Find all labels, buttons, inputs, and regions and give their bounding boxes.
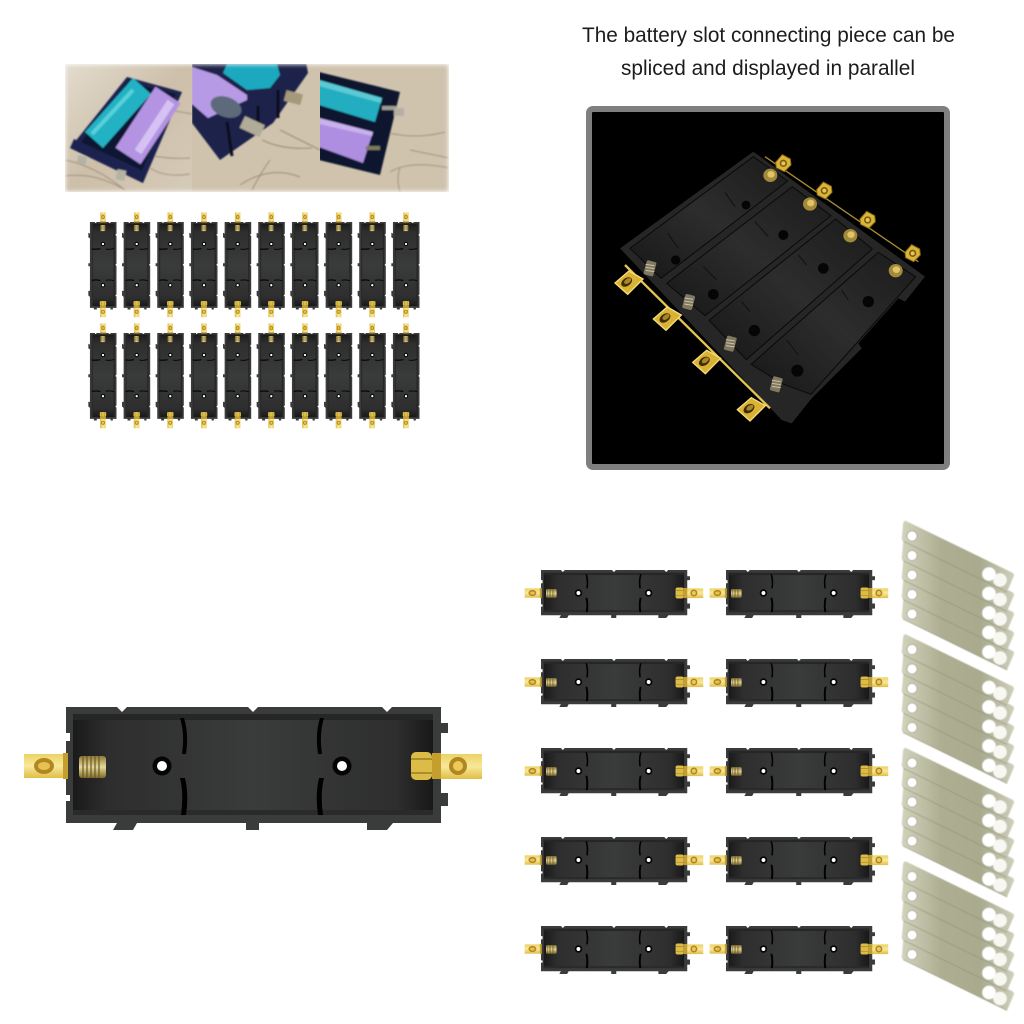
holder r2c9 [358,323,386,428]
holder r2c10 [391,323,420,428]
holder c1r2 [525,659,703,707]
holder r1c8 [324,212,352,317]
holder c2r1 [710,570,888,618]
holder r1c9 [358,212,386,317]
photo: holder with two cells, angled [65,64,192,192]
plate stack two [902,634,1014,784]
framed black panel [589,109,947,467]
slot holes [671,201,874,377]
photo: close-up of terminals [192,62,320,192]
holder r2c5 [223,323,251,428]
holder r1c4 [189,212,218,317]
plate stack four [902,861,1014,1010]
upper lugs [763,155,920,277]
holder r1c2 [122,212,150,317]
holder c1r5 [525,926,703,974]
lower lugs and screws [615,260,783,421]
heading [582,24,955,80]
holder r2c3 [156,323,184,428]
slot four [751,252,916,394]
heading line one: The battery slot connecting piece can be [582,24,955,47]
holder r1c10 [391,212,420,317]
holder r1c1 [88,212,116,317]
holder r2c4 [189,323,218,428]
holder r1c5 [223,212,251,317]
plate stack three [902,748,1014,897]
panel: four holders spliced in parallel [589,109,947,467]
holder c2r4 [710,837,888,885]
lower connecting strip [625,265,770,408]
holder r2c7 [290,323,318,428]
holder r1c7 [290,212,318,317]
holder c1r4 [525,837,703,885]
panel: product photos [62,61,452,195]
holder r1c3 [156,212,184,317]
photo edge fade [62,61,452,195]
assembly body [620,152,925,423]
slot three [709,219,872,360]
panel: twenty holders, upright, row one [88,212,419,317]
slot two [667,187,831,316]
isometric holder assembly [615,152,925,423]
panel: ten holders, horizontal [525,570,888,974]
holder c2r3 [710,748,888,796]
slot one [630,157,788,278]
holder r2c2 [122,323,150,428]
holder c2r5 [710,926,888,974]
holder r1c6 [257,212,285,317]
panel: nickel connecting plates [902,521,1014,1010]
plate stack one [902,521,1014,670]
large single holder [24,707,482,830]
panel: twenty holders, upright, row two [88,323,419,428]
upper connecting strip [765,157,918,262]
holder r2c8 [324,323,352,428]
holder r2c6 [257,323,285,428]
photo: holder seen from the side [319,64,449,192]
holder c2r2 [710,659,888,707]
holder c1r3 [525,748,703,796]
holder c1r1 [525,570,703,618]
slot dividers [668,192,848,355]
heading line two: spliced and displayed in parallel [621,57,915,80]
holder r2c1 [88,323,116,428]
